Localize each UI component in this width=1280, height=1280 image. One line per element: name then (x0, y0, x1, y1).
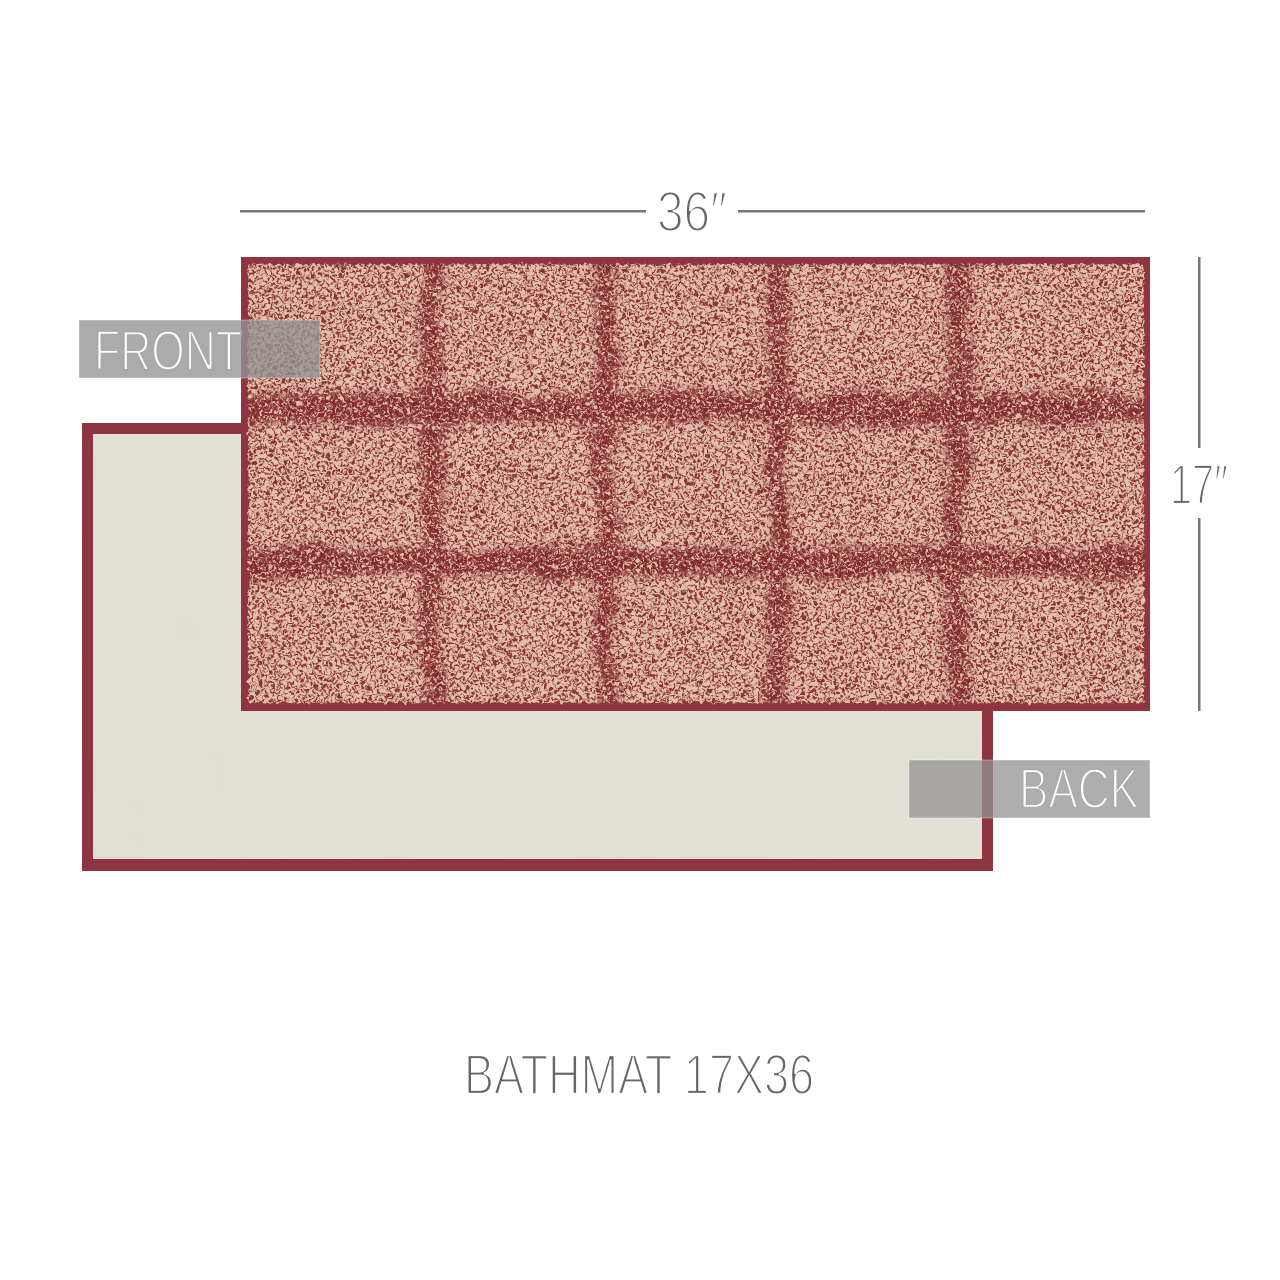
back mat (82, 423, 993, 871)
infographic: bathmat dimensions (79, 192, 1226, 1094)
label: back: BACK (1019, 757, 1139, 821)
front mat pile (248, 264, 1144, 703)
front mat binding (241, 257, 1150, 711)
label: back (909, 757, 1150, 821)
label: front: FRONT (94, 319, 242, 383)
width dimension: 36 inches: 36″ (657, 180, 727, 244)
back mat canvas (93, 434, 982, 859)
caption: BATHMAT 17X36 (464, 1043, 814, 1107)
front mat plaid bands (248, 264, 1144, 703)
front mat (241, 257, 1150, 711)
height dimension: 17 inches: 17″ (1170, 453, 1228, 517)
back mat binding (82, 423, 993, 871)
